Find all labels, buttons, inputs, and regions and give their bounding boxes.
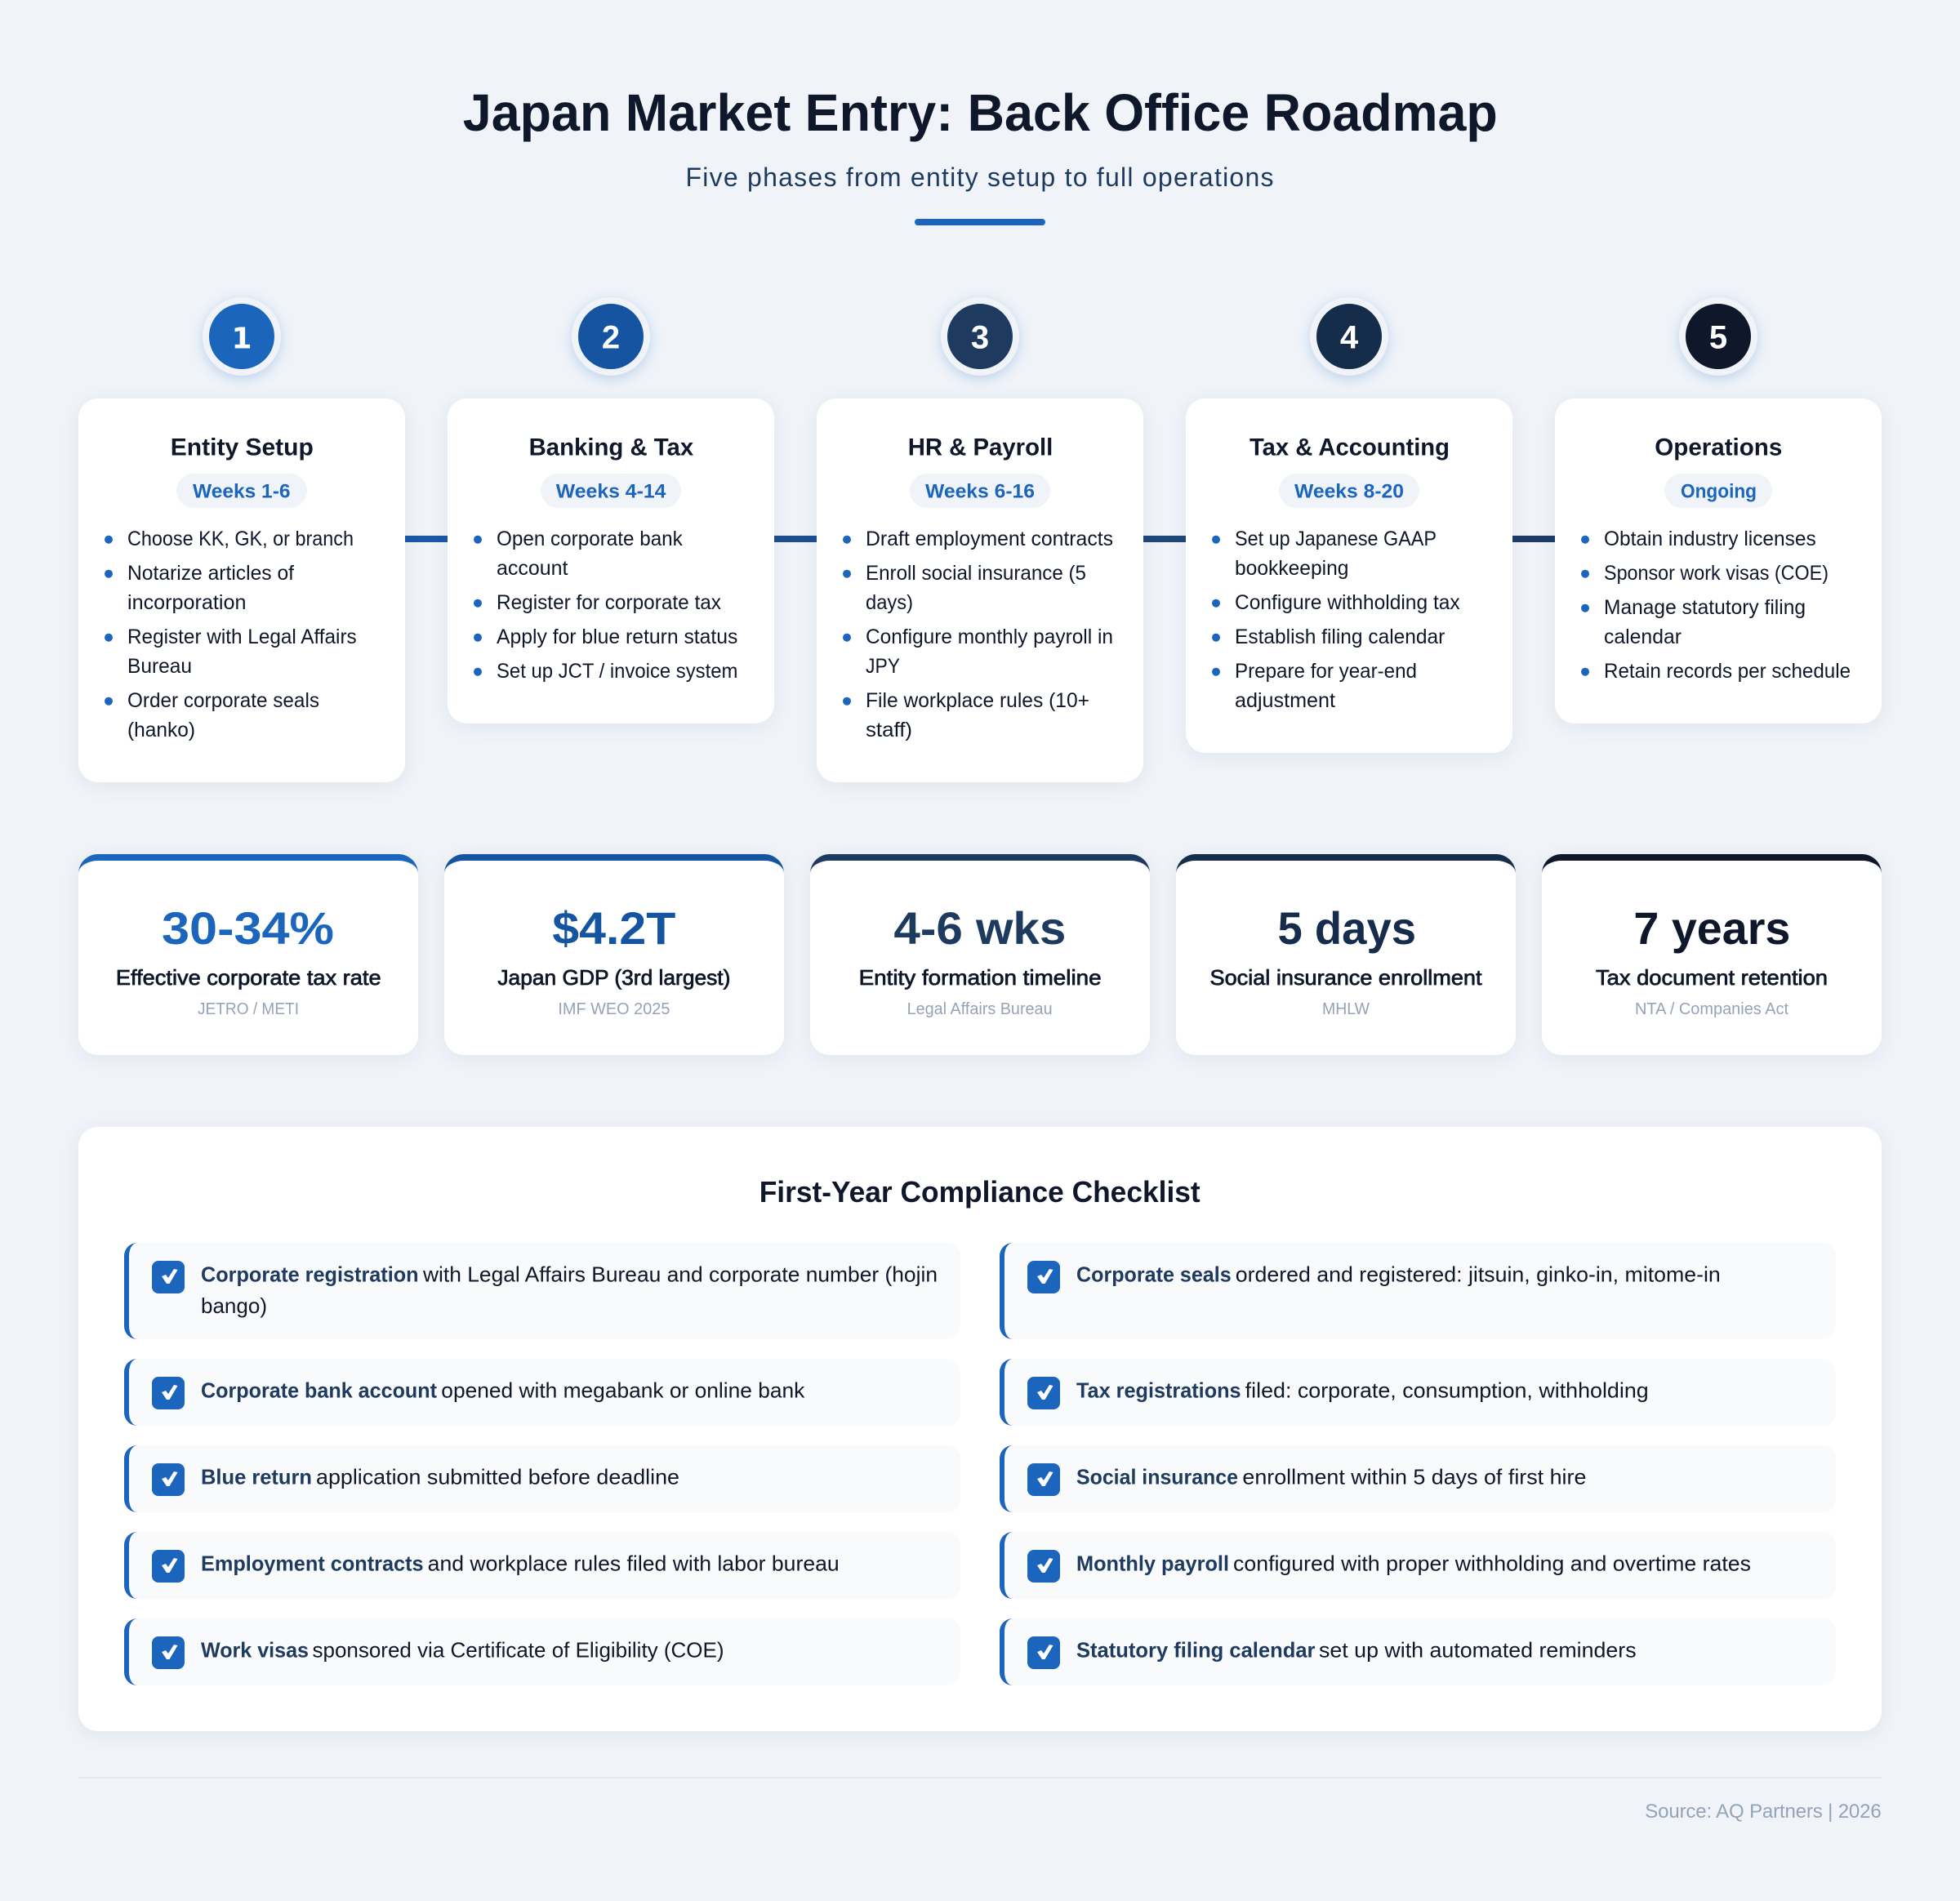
step badge 2: 2 <box>602 320 620 356</box>
phase 4: Tax & Accounting <box>1186 294 1512 756</box>
stat value: 7 years <box>1633 902 1790 954</box>
task list: Notarize articles of <box>127 562 294 585</box>
timing pill <box>1664 474 1772 508</box>
timing pill: Ongoing <box>1681 480 1757 503</box>
card: Tax & Accounting <box>1186 398 1512 753</box>
item text <box>201 1378 805 1403</box>
item text: Work visas <box>201 1638 309 1663</box>
task list: Sponsor work visas (COE) <box>1604 562 1829 585</box>
task list: Choose KK, GK, or branch <box>127 528 354 550</box>
panel: compliance checklist <box>78 1127 1882 1731</box>
item text <box>201 1262 938 1318</box>
item: blue return <box>124 1445 960 1512</box>
item text: Corporate bank account <box>201 1378 437 1403</box>
task list: (hanko) <box>127 719 195 741</box>
step badge 4 <box>1310 297 1388 376</box>
item: social insurance <box>1000 1445 1836 1512</box>
task list: Open corporate bank <box>497 528 683 550</box>
item: corporate registration <box>124 1243 960 1339</box>
item text: bango) <box>201 1293 267 1318</box>
item: work visas <box>124 1618 960 1685</box>
task list: Retain records per schedule <box>1604 660 1851 683</box>
item text <box>1076 1465 1586 1489</box>
phase 2: Banking & Tax <box>448 294 774 727</box>
stat label: Entity formation timeline <box>859 965 1102 990</box>
task list <box>843 528 1113 741</box>
item text: filed: corporate, consumption, withholding <box>1245 1378 1649 1403</box>
stat card: social insurance <box>1176 854 1516 1055</box>
task list: Set up Japanese GAAP <box>1235 528 1437 550</box>
phase 3: HR & Payroll <box>817 294 1143 786</box>
icon: checkbox <box>1027 1550 1060 1583</box>
stat label: Social insurance enrollment <box>1210 965 1482 990</box>
task list: Draft employment contracts <box>866 528 1113 550</box>
stat source: IMF WEO 2025 <box>558 1000 670 1018</box>
item text <box>1076 1378 1649 1403</box>
timing pill: Weeks 1-6 <box>193 480 291 503</box>
icon: checkbox <box>152 1463 185 1496</box>
timing pill: Weeks 4-14 <box>556 480 666 503</box>
timing pill <box>541 474 681 508</box>
stat value: 5 days <box>1277 902 1416 954</box>
phase name: Tax & Accounting <box>1250 434 1450 461</box>
icon: checkbox <box>152 1550 185 1583</box>
task list: Configure monthly payroll in <box>866 626 1113 648</box>
connector 4 to 5 <box>1512 536 1555 542</box>
item: tax registrations <box>1000 1359 1836 1426</box>
task list: days) <box>866 591 913 614</box>
phase name: HR & Payroll <box>908 434 1053 461</box>
task list: Bureau <box>127 655 192 678</box>
icon: checkbox <box>152 1636 185 1669</box>
stat value: $4.2T <box>552 902 675 954</box>
item text: opened with megabank or online bank <box>441 1378 805 1403</box>
task list: Enroll social insurance (5 <box>866 562 1086 585</box>
item text: enrollment within 5 days of first hire <box>1242 1465 1586 1489</box>
title: Japan Market Entry: Back Office Roadmap <box>463 83 1498 142</box>
item text: with Legal Affairs Bureau and corporate number (hojin <box>422 1262 938 1287</box>
connector 3 to 4 <box>1143 536 1186 542</box>
phase name: Entity Setup <box>171 434 314 461</box>
footer source: Source: AQ Partners | 2026 <box>1645 1801 1882 1823</box>
checklist heading: First-Year Compliance Checklist <box>760 1175 1200 1209</box>
stat source: MHLW <box>1322 1000 1370 1018</box>
item text: ordered and registered: jitsuin, ginko-in, mitome-in <box>1236 1262 1721 1287</box>
timing pill: Weeks 8-20 <box>1294 480 1404 503</box>
task list <box>105 528 357 741</box>
stat card: entity formation <box>810 854 1150 1055</box>
stat label: Effective corporate tax rate <box>116 965 381 990</box>
connector 2 to 3 <box>774 536 817 542</box>
card: Banking & Tax <box>448 398 774 723</box>
item text: Blue return <box>201 1465 312 1489</box>
subtitle: Five phases from entity setup to full operations <box>686 162 1274 192</box>
stat source: NTA / Companies Act <box>1635 1000 1788 1018</box>
connector 1 to 2 <box>405 536 448 542</box>
task list: calendar <box>1604 626 1682 648</box>
step badge 4: 4 <box>1340 320 1359 356</box>
stat label: Tax document retention <box>1596 965 1828 990</box>
item text: Corporate seals <box>1076 1262 1232 1287</box>
task list: Set up JCT / invoice system <box>497 660 737 683</box>
task list <box>1212 528 1460 712</box>
task list: Manage statutory filing <box>1604 596 1806 619</box>
phase name: Banking & Tax <box>529 434 693 461</box>
header accent bar <box>915 219 1045 225</box>
stat label: Japan GDP (3rd largest) <box>497 965 730 990</box>
item text: Statutory filing calendar <box>1076 1638 1315 1663</box>
item text: Monthly payroll <box>1076 1552 1229 1576</box>
card: Operations <box>1555 398 1882 723</box>
item: statutory filing calendar <box>1000 1618 1836 1685</box>
icon: checkbox <box>1027 1463 1060 1496</box>
step badge 5: 5 <box>1709 320 1727 356</box>
phase name: Operations <box>1655 434 1782 461</box>
item text: Social insurance <box>1076 1465 1238 1489</box>
item: corporate seals <box>1000 1243 1836 1339</box>
task list: JPY <box>866 655 900 678</box>
item: corporate bank account <box>124 1359 960 1426</box>
step badge 3 <box>941 297 1019 376</box>
icon: checkbox <box>1027 1377 1060 1409</box>
phase 1: Entity Setup <box>78 294 405 786</box>
icon: checkbox <box>1027 1261 1060 1293</box>
card: HR & Payroll <box>817 398 1143 782</box>
step badge 1: 1 <box>231 322 252 356</box>
phase 5: Operations <box>1555 294 1882 727</box>
item text: set up with automated reminders <box>1319 1638 1637 1663</box>
task list: Prepare for year-end <box>1235 660 1417 683</box>
task list: File workplace rules (10+ <box>866 689 1089 712</box>
task list: Register for corporate tax <box>497 591 721 614</box>
item text: Employment contracts <box>201 1552 424 1576</box>
task list: Establish filing calendar <box>1235 626 1445 648</box>
stat card: Japan GDP <box>444 854 784 1055</box>
item text <box>201 1552 840 1576</box>
item: monthly payroll <box>1000 1532 1836 1599</box>
task list: Configure withholding tax <box>1235 591 1460 614</box>
task list: adjustment <box>1235 689 1335 712</box>
stat card: document retention <box>1542 854 1882 1055</box>
item text: Tax registrations <box>1076 1378 1241 1403</box>
header <box>463 83 1498 225</box>
item text: application submitted before deadline <box>316 1465 679 1489</box>
icon: checkbox <box>152 1377 185 1409</box>
item: employment contracts <box>124 1532 960 1599</box>
timing pill: Weeks 6-16 <box>925 480 1035 503</box>
card: Entity Setup <box>78 398 405 782</box>
icon: checkbox <box>1027 1636 1060 1669</box>
stat source: JETRO / METI <box>198 1000 299 1018</box>
task list <box>1581 528 1851 683</box>
task list: Obtain industry licenses <box>1604 528 1816 550</box>
item text <box>1076 1638 1637 1663</box>
item text: sponsored via Certificate of Eligibility (COE) <box>312 1638 724 1663</box>
stat card: corporate tax rate <box>78 854 418 1055</box>
item text: and workplace rules filed with labor bureau <box>428 1552 840 1576</box>
step badge 1 <box>203 297 281 376</box>
stat source: Legal Affairs Bureau <box>907 1000 1053 1018</box>
task list: bookkeeping <box>1235 557 1349 580</box>
task list: Apply for blue return status <box>497 626 737 648</box>
task list: staff) <box>866 719 912 741</box>
timing pill <box>176 474 307 508</box>
step badge 5 <box>1679 297 1757 376</box>
item text: Corporate registration <box>201 1262 419 1287</box>
timing pill <box>910 474 1050 508</box>
icon: checkbox <box>152 1261 185 1293</box>
step badge 2 <box>572 297 650 376</box>
item text: configured with proper withholding and overtime rates <box>1233 1552 1751 1576</box>
task list: account <box>497 557 568 580</box>
task list: Order corporate seals <box>127 689 319 712</box>
stat value: 4-6 wks <box>893 902 1066 954</box>
stat value: 30-34% <box>162 902 334 954</box>
timing pill <box>1279 474 1419 508</box>
step badge 3: 3 <box>971 320 989 356</box>
task list: incorporation <box>127 591 247 614</box>
task list <box>474 528 737 683</box>
task list: Register with Legal Affairs <box>127 626 357 648</box>
